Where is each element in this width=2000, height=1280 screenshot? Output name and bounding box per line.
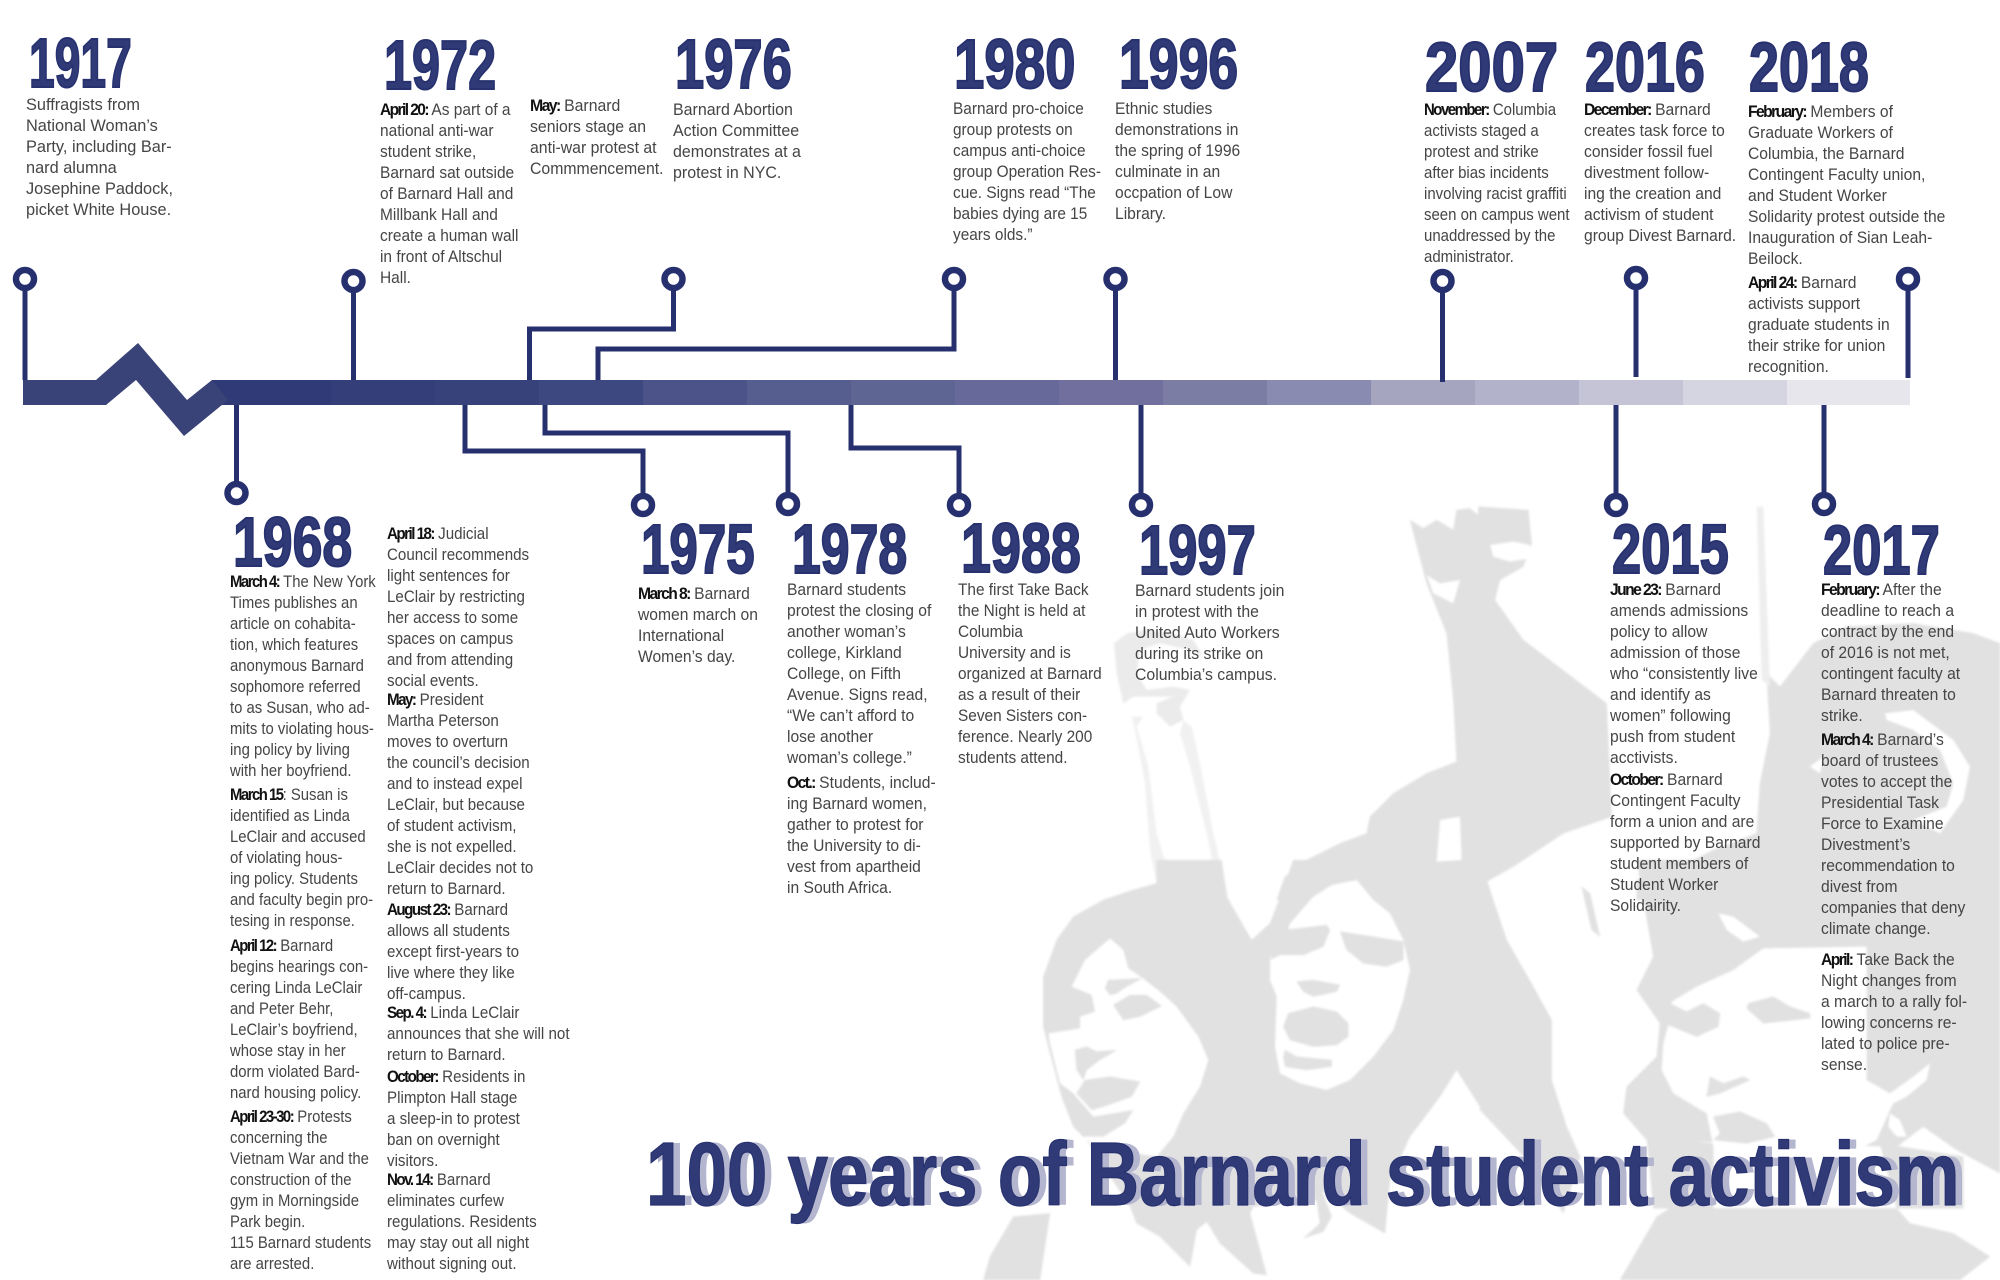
event: 1968: Park begin.	[230, 1212, 305, 1230]
event: 2017: companies that deny	[1821, 898, 1965, 916]
event: 1975: 1975	[641, 510, 755, 588]
event: 2017: of 2016 is not met,	[1821, 642, 1950, 662]
event: 2018: April 24: Barnard	[1748, 272, 1856, 292]
event: 2018: recognition.	[1748, 356, 1828, 376]
event: 1968: dorm violated Bard-	[230, 1062, 360, 1080]
event: 1917: Party, including Bar-	[26, 136, 172, 156]
event: 2016	[1584, 28, 1736, 244]
event: 1972: of Barnard Hall and	[380, 184, 513, 202]
event: 1978: College, on Fifth	[787, 664, 901, 682]
event: 2016: 2016	[1585, 28, 1705, 106]
event: 2017: strike.	[1821, 706, 1863, 724]
event: 1968: LeClair’s boyfriend,	[230, 1020, 358, 1038]
event: 2015: admission of those	[1610, 642, 1740, 662]
event: 2017: deadline to reach a	[1821, 600, 1954, 620]
event: 2017: contract by the end	[1821, 622, 1954, 640]
1968 second column: return to Barnard.	[387, 878, 506, 898]
1968 second column: regulations. Residents	[387, 1212, 537, 1230]
event: 1988: the Night is held at	[958, 600, 1085, 620]
event: 2015: amends admissions	[1610, 600, 1748, 620]
event: 2018: Inauguration of Sian Leah-	[1748, 228, 1932, 246]
event: 1978: protest the closing of	[787, 600, 931, 620]
event: 1972: April 20: As part of a	[380, 100, 510, 118]
event: 2007: involving racist graffiti	[1424, 184, 1566, 202]
event: 1980: 1980	[954, 25, 1075, 103]
1968 second column: Nov. 14: Barnard	[387, 1170, 491, 1188]
1968 second column: August 23: Barnard	[387, 900, 508, 918]
event: 1968: tion, which features	[230, 634, 358, 654]
1968 second column: allows all students	[387, 920, 510, 940]
event: 1975: women march on	[638, 604, 758, 624]
event: 1980: babies dying are 15	[953, 204, 1087, 222]
event: 1968: cering Linda LeClair	[230, 978, 362, 996]
event: 1996: 1996	[1119, 24, 1238, 102]
event: 2017: 2017	[1823, 510, 1940, 588]
1968 second column: the council’s decision	[387, 752, 530, 772]
event: 1996: culminate in an	[1115, 162, 1220, 180]
event: 1978: Oct.: Students, includ-	[787, 772, 936, 792]
event: 2017: February: After the	[1821, 580, 1942, 598]
event: 1968: March 15: Susan is	[230, 784, 348, 804]
event: 1972: 1972	[384, 26, 496, 104]
event: 2007: 2007	[1425, 28, 1558, 106]
event: 2017: Barnard threaten to	[1821, 684, 1956, 704]
1972 May note: May: Barnard	[530, 96, 620, 114]
event: 2015: June 23: Barnard	[1610, 580, 1721, 598]
event: 1975	[638, 510, 758, 666]
event: 1978: vest from apartheid	[787, 856, 921, 876]
event: 2018: graduate students in	[1748, 314, 1889, 334]
event: 1978: 1978	[792, 510, 907, 588]
event: 1917	[26, 24, 173, 218]
event: 2015: supported by Barnard	[1610, 832, 1760, 852]
1968 second column: light sentences for	[387, 566, 510, 584]
1968 second column: October: Residents in	[387, 1066, 525, 1086]
event: 1997: United Auto Workers	[1135, 622, 1280, 642]
1968 second column: Plimpton Hall stage	[387, 1088, 517, 1106]
event: 1972: Millbank Hall and	[380, 204, 497, 224]
event: 1976: Barnard Abortion	[673, 100, 793, 118]
event: 1917: 1917	[29, 24, 132, 102]
event: 1975: International	[638, 626, 724, 644]
event: 1988: organized at Barnard	[958, 664, 1102, 682]
event: 2018: and Student Worker	[1748, 186, 1886, 204]
event: 1988: students attend.	[958, 748, 1067, 766]
pins	[16, 269, 1917, 514]
event: 1978: college, Kirkland	[787, 642, 902, 662]
event: 2016: consider fossil fuel	[1584, 142, 1713, 160]
event: 2015: Student Worker	[1610, 874, 1718, 894]
event: 2018	[1748, 28, 1945, 376]
event: 2015: push from student	[1610, 726, 1735, 746]
event: 2018: Beilock.	[1748, 248, 1802, 268]
event: 1968: of violating hous-	[230, 848, 342, 866]
event: 2017: contingent faculty at	[1821, 664, 1960, 682]
event: 2017: March 4: Barnard’s	[1821, 730, 1944, 748]
1968 second column: except first-years to	[387, 942, 519, 960]
event: 2007: administrator.	[1424, 246, 1513, 266]
event: 1997: 1997	[1139, 510, 1256, 588]
1968 second column: social events.	[387, 670, 479, 690]
1968 second column: and from attending	[387, 650, 513, 668]
event: 1972: Hall.	[380, 268, 410, 286]
event: 1976: protest in NYC.	[673, 162, 781, 182]
event: 1997	[1135, 510, 1284, 684]
event: 1978: another woman’s	[787, 622, 906, 640]
1968 second column: live where they like	[387, 962, 515, 982]
event: 2015: Contingent Faculty	[1610, 790, 1740, 810]
event: 1980: group protests on	[953, 120, 1073, 138]
event: 1968: mits to violating hous-	[230, 718, 374, 738]
event: 1978: the University to di-	[787, 836, 921, 854]
1968 second column: announces that she will not	[387, 1024, 570, 1042]
event: 2015: 2015	[1612, 510, 1729, 588]
event: 1996: the spring of 1996	[1115, 140, 1240, 160]
event: 1980: years olds.”	[953, 224, 1033, 244]
event: 1968: ing policy. Students	[230, 868, 358, 888]
event: 1968: anonymous Barnard	[230, 656, 364, 674]
event: 2016: December: Barnard	[1584, 100, 1711, 118]
event: 1968: April 23-30: Protests	[230, 1106, 352, 1126]
event: 1975: March 8: Barnard	[638, 584, 750, 602]
event: 2017: recommendation to	[1821, 856, 1955, 874]
event: 2017: board of trustees	[1821, 750, 1938, 770]
event: 2007	[1424, 28, 1570, 266]
1968 second column: and to instead expel	[387, 774, 522, 792]
1968 second column: of student activism,	[387, 816, 517, 834]
event: 1978: ing Barnard women,	[787, 794, 927, 812]
event: 1968: Times publishes an	[230, 592, 358, 612]
event: 1968: nard housing policy.	[230, 1082, 361, 1102]
event: 2007: after bias incidents	[1424, 162, 1548, 182]
1968 second column: LeClair by restricting	[387, 586, 525, 606]
event: 2017: Presidential Task	[1821, 792, 1939, 812]
event: 2015: form a union and are	[1610, 812, 1754, 830]
event: 2017: lated to police pre-	[1821, 1034, 1950, 1052]
1968 second column: LeClair decides not to	[387, 858, 533, 876]
event: 2015: and identify as	[1610, 684, 1711, 704]
event: 2007: seen on campus went	[1424, 204, 1569, 224]
event: 1968: article on cohabita-	[230, 614, 356, 632]
event: 2016: creates task force to	[1584, 120, 1725, 140]
timeline bar segments	[205, 380, 1910, 405]
event: 1968: begins hearings con-	[230, 956, 368, 976]
event: 2007: activists staged a	[1424, 120, 1538, 140]
1968 second column	[387, 524, 570, 1272]
1968 second column: off-campus.	[387, 984, 466, 1002]
event: 2017: a march to a rally fol-	[1821, 992, 1967, 1010]
event: 1988: Columbia	[958, 622, 1023, 640]
event: 1968: are arrested.	[230, 1254, 314, 1272]
event: 1978: Avenue. Signs read,	[787, 684, 928, 704]
event: 1968: ing policy by living	[230, 740, 350, 758]
event: 2018: Columbia, the Barnard	[1748, 144, 1904, 162]
event: 1988: as a result of their	[958, 684, 1080, 704]
event: 1980: group Operation Res-	[953, 162, 1101, 180]
event: 2017: Night changes from	[1821, 970, 1957, 990]
event: 2016: group Divest Barnard.	[1584, 226, 1736, 244]
event: 1978: in South Africa.	[787, 878, 892, 896]
event: 2016: ing the creation and	[1584, 184, 1721, 202]
zigzag break in timeline	[23, 343, 228, 436]
event: 2016: activism of student	[1584, 204, 1714, 224]
1968 second column: Sep. 4: Linda LeClair	[387, 1002, 519, 1022]
event: 1988: University and is	[958, 642, 1071, 662]
event: 1917: Suffragists from	[26, 94, 140, 114]
event: 1976	[673, 25, 801, 182]
1968 second column: without signing out.	[387, 1254, 517, 1272]
event: 2015: policy to allow	[1610, 622, 1707, 640]
event: 1978: “We can’t afford to	[787, 706, 914, 724]
event: 1968: concerning the	[230, 1128, 328, 1146]
event: 1996: Ethnic studies	[1115, 98, 1212, 118]
event: 1976: Action Committee	[673, 120, 799, 140]
event: 1988: ference. Nearly 200	[958, 726, 1092, 746]
event: 1968: April 12: Barnard	[230, 936, 333, 954]
event: 2015: women” following	[1610, 706, 1731, 724]
1968 second column: may stay out all night	[387, 1232, 529, 1252]
event: 2017: lowing concerns re-	[1821, 1012, 1957, 1032]
event: 2017: sense.	[1821, 1054, 1867, 1074]
event: 1917: Josephine Paddock,	[26, 178, 173, 198]
event: 2017: votes to accept the	[1821, 772, 1952, 790]
event: 2015	[1610, 510, 1760, 914]
event: 1968: LeClair and accused	[230, 826, 366, 846]
event: 2018: February: Members of	[1748, 102, 1892, 120]
1968 second column: April 18: Judicial	[387, 524, 489, 542]
event: 2015: acctivists.	[1610, 748, 1678, 766]
event: 1968: March 4: The New York	[230, 572, 376, 590]
event: 2017: climate change.	[1821, 918, 1931, 938]
event: 1968: identified as Linda	[230, 806, 350, 824]
event: 2015: student members of	[1610, 854, 1748, 872]
event: 1972: Barnard sat outside	[380, 162, 514, 182]
event: 1978: gather to protest for	[787, 814, 924, 834]
event: 1968: 115 Barnard students	[230, 1232, 371, 1252]
event: 1997: Columbia’s campus.	[1135, 664, 1277, 684]
event: 2007: unaddressed by the	[1424, 226, 1555, 244]
event: 1968: whose stay in her	[230, 1040, 346, 1060]
event: 1972: in front of Altschul	[380, 246, 502, 266]
event: 1988: The first Take Back	[958, 580, 1089, 598]
event: 2018: their strike for union	[1748, 336, 1885, 354]
event: 1978: Barnard students	[787, 580, 906, 598]
event: 1976: demonstrates at a	[673, 142, 801, 160]
event: 1978: woman’s college.”	[787, 748, 912, 766]
event: 1972: national anti-war	[380, 120, 493, 140]
event: 1996: occpation of Low	[1115, 182, 1232, 202]
event: 1978: lose another	[787, 726, 873, 746]
event: 1996: Library.	[1115, 204, 1166, 222]
1968 second column: she is not expelled.	[387, 836, 517, 856]
event: 1917: National Woman’s	[26, 116, 158, 134]
event: 2007: protest and strike	[1424, 142, 1538, 160]
event: 1968: construction of the	[230, 1170, 352, 1188]
event: 2017	[1821, 510, 1967, 1074]
event: 1917: picket White House.	[26, 200, 171, 218]
1968 second column: visitors.	[387, 1150, 438, 1170]
title: 100 years of Barnard student activism	[646, 1125, 1960, 1225]
connector lines	[25, 284, 1908, 499]
1968 second column: Council recommends	[387, 544, 529, 564]
event: 1917: nard alumna	[26, 158, 117, 176]
1972 May note: Commmencement.	[530, 158, 663, 178]
1968 second column: Martha Peterson	[387, 710, 499, 730]
event: 2018: Graduate Workers of	[1748, 122, 1892, 142]
event: 1968: Vietnam War and the	[230, 1148, 369, 1168]
event: 1972	[380, 26, 663, 286]
event: 1968: and faculty begin pro-	[230, 890, 373, 908]
event: 1980: cue. Signs read “The	[953, 182, 1096, 202]
event: 1988: Seven Sisters con-	[958, 706, 1087, 724]
1968 second column: moves to overturn	[387, 732, 508, 750]
event: 1968: and Peter Behr,	[230, 998, 333, 1018]
event: 1996	[1115, 24, 1240, 222]
event: 1976: 1976	[675, 25, 792, 103]
1972 May note: anti-war protest at	[530, 138, 656, 156]
1972 May note	[530, 96, 663, 178]
1968 second column: eliminates curfew	[387, 1190, 504, 1210]
event: 2015: who “consistently live	[1610, 664, 1758, 682]
event: 1968: 1968	[233, 502, 352, 580]
event: 1997: in protest with the	[1135, 602, 1259, 620]
event: 1988: 1988	[961, 508, 1081, 586]
event: 1980: Barnard pro-choice	[953, 98, 1084, 118]
event: 1972: student strike,	[380, 142, 476, 160]
event: 2016: divestment follow-	[1584, 162, 1709, 182]
event: 1980	[953, 25, 1101, 244]
event: 1980: campus anti-choice	[953, 140, 1086, 160]
event: 2018: activists support	[1748, 294, 1860, 312]
1968 second column: a sleep-in to protest	[387, 1108, 520, 1128]
event: 2007: November: Columbia	[1424, 100, 1556, 118]
event: 2018: Contingent Faculty union,	[1748, 164, 1925, 184]
event: 1996: demonstrations in	[1115, 120, 1238, 138]
1968 second column: ban on overnight	[387, 1130, 500, 1148]
event: 1968: tesing in response.	[230, 910, 355, 930]
event: 2015: October: Barnard	[1610, 770, 1723, 788]
event: 1997: during its strike on	[1135, 644, 1263, 662]
event: 1988	[958, 508, 1102, 766]
event: 1968: gym in Morningside	[230, 1190, 359, 1210]
event: 2017: April: Take Back the	[1821, 950, 1955, 968]
1968 second column: return to Barnard.	[387, 1044, 506, 1064]
1968 second column: her access to some	[387, 608, 518, 626]
event: 1968: sophomore referred	[230, 676, 361, 696]
event: 2018: Solidarity protest outside the	[1748, 206, 1945, 226]
1968 second column: LeClair, but because	[387, 794, 525, 814]
event: 1975: Women’s day.	[638, 646, 735, 666]
event: 2015: Solidairity.	[1610, 896, 1681, 914]
event: 1997: Barnard students join	[1135, 580, 1284, 600]
event: 2017: divest from	[1821, 876, 1897, 896]
1968 second column: May: President	[387, 690, 484, 708]
event: 1968: with her boyfriend.	[230, 760, 352, 780]
event: 2017: Force to Examine	[1821, 814, 1944, 832]
1972 May note: seniors stage an	[530, 116, 646, 136]
event: 1972: create a human wall	[380, 226, 518, 244]
event: 2018: 2018	[1749, 28, 1869, 106]
event: 1978	[787, 510, 936, 896]
event: 1968	[230, 502, 570, 1272]
event: 1968: to as Susan, who ad-	[230, 698, 370, 716]
event: 2017: Divestment’s	[1821, 834, 1910, 854]
1968 second column: spaces on campus	[387, 628, 513, 648]
